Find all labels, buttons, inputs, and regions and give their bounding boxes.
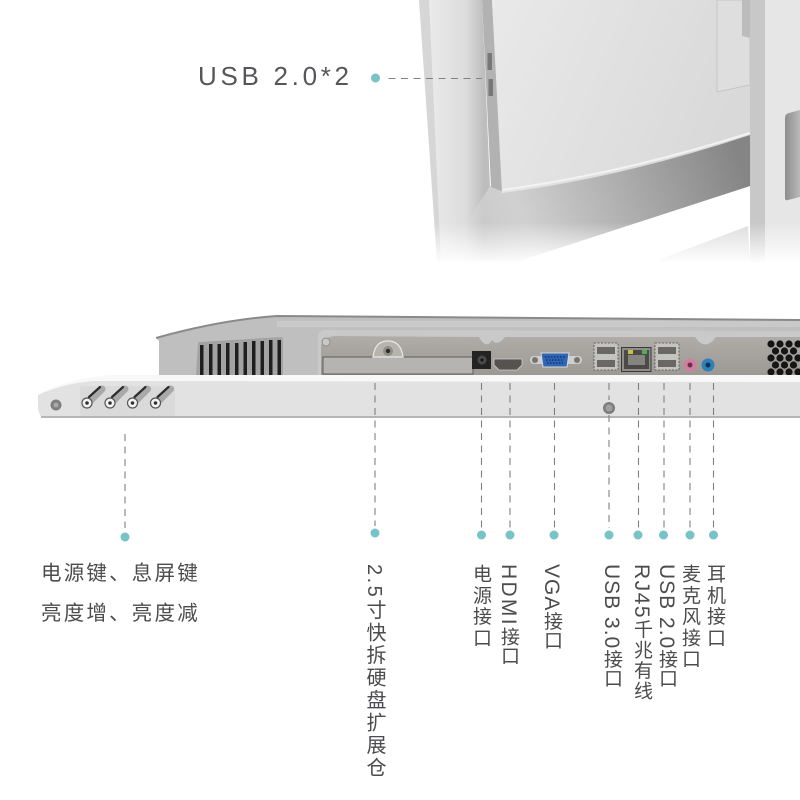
monitor back shell xyxy=(419,0,750,262)
shadow beneath panel xyxy=(442,134,750,262)
base front edge xyxy=(38,375,800,418)
RJ45 port xyxy=(622,348,651,372)
panel side strip xyxy=(482,0,503,192)
label: power port: 电源接口 xyxy=(470,564,491,649)
callout lines and dots xyxy=(120,74,718,542)
DC power jack xyxy=(472,351,491,369)
label: power and screen-off keys: 电源键、息屏键 xyxy=(41,562,200,585)
USB 3.0 ports xyxy=(594,343,618,370)
VGA port xyxy=(530,353,582,367)
headphone jack xyxy=(702,358,714,372)
USB ports on side xyxy=(488,53,492,70)
label: microphone port: 麦克风接口 xyxy=(679,564,700,670)
lower secondary shadow xyxy=(653,226,750,262)
shell outer edge xyxy=(419,0,441,262)
drive bay cover xyxy=(323,357,473,374)
label: brightness keys: 亮度增、亮度减 xyxy=(41,602,200,625)
upper right inset xyxy=(717,0,750,92)
front control buttons xyxy=(80,386,175,416)
right cutout xyxy=(785,110,800,200)
port bay xyxy=(318,330,800,376)
vent grille xyxy=(196,337,283,375)
hex vent xyxy=(767,340,800,376)
base screw xyxy=(603,402,615,414)
right column xyxy=(750,0,765,262)
label: VGA port: VGA 接口 xyxy=(540,564,563,649)
label: drive bay: 2.5寸快拆硬盘扩展仓 xyxy=(363,564,385,779)
HDMI port xyxy=(494,359,522,370)
microphone jack xyxy=(684,358,696,372)
label: USB 2.0*2: USB 2.0*2 xyxy=(198,61,353,91)
keyhole recess xyxy=(373,341,403,357)
label: HDMI port: HDMI 接口 xyxy=(497,564,520,665)
label: USB 3.0 port: USB 3.0 接口 xyxy=(600,564,623,687)
label: RJ45 port: RJ45 千兆有线 xyxy=(630,564,653,701)
USB 2.0 ports xyxy=(655,343,679,370)
rear panel xyxy=(492,0,750,193)
label: USB 2.0 port: USB 2.0 接口 xyxy=(655,564,678,687)
label: headphone port: 耳机接口 xyxy=(704,564,725,649)
monitor bottom view xyxy=(38,316,800,418)
monitor back, top photo xyxy=(410,0,800,264)
monitor body underside xyxy=(156,316,800,378)
power indicator xyxy=(50,400,62,410)
screw tabs xyxy=(322,338,330,346)
bottom fade xyxy=(410,222,800,264)
